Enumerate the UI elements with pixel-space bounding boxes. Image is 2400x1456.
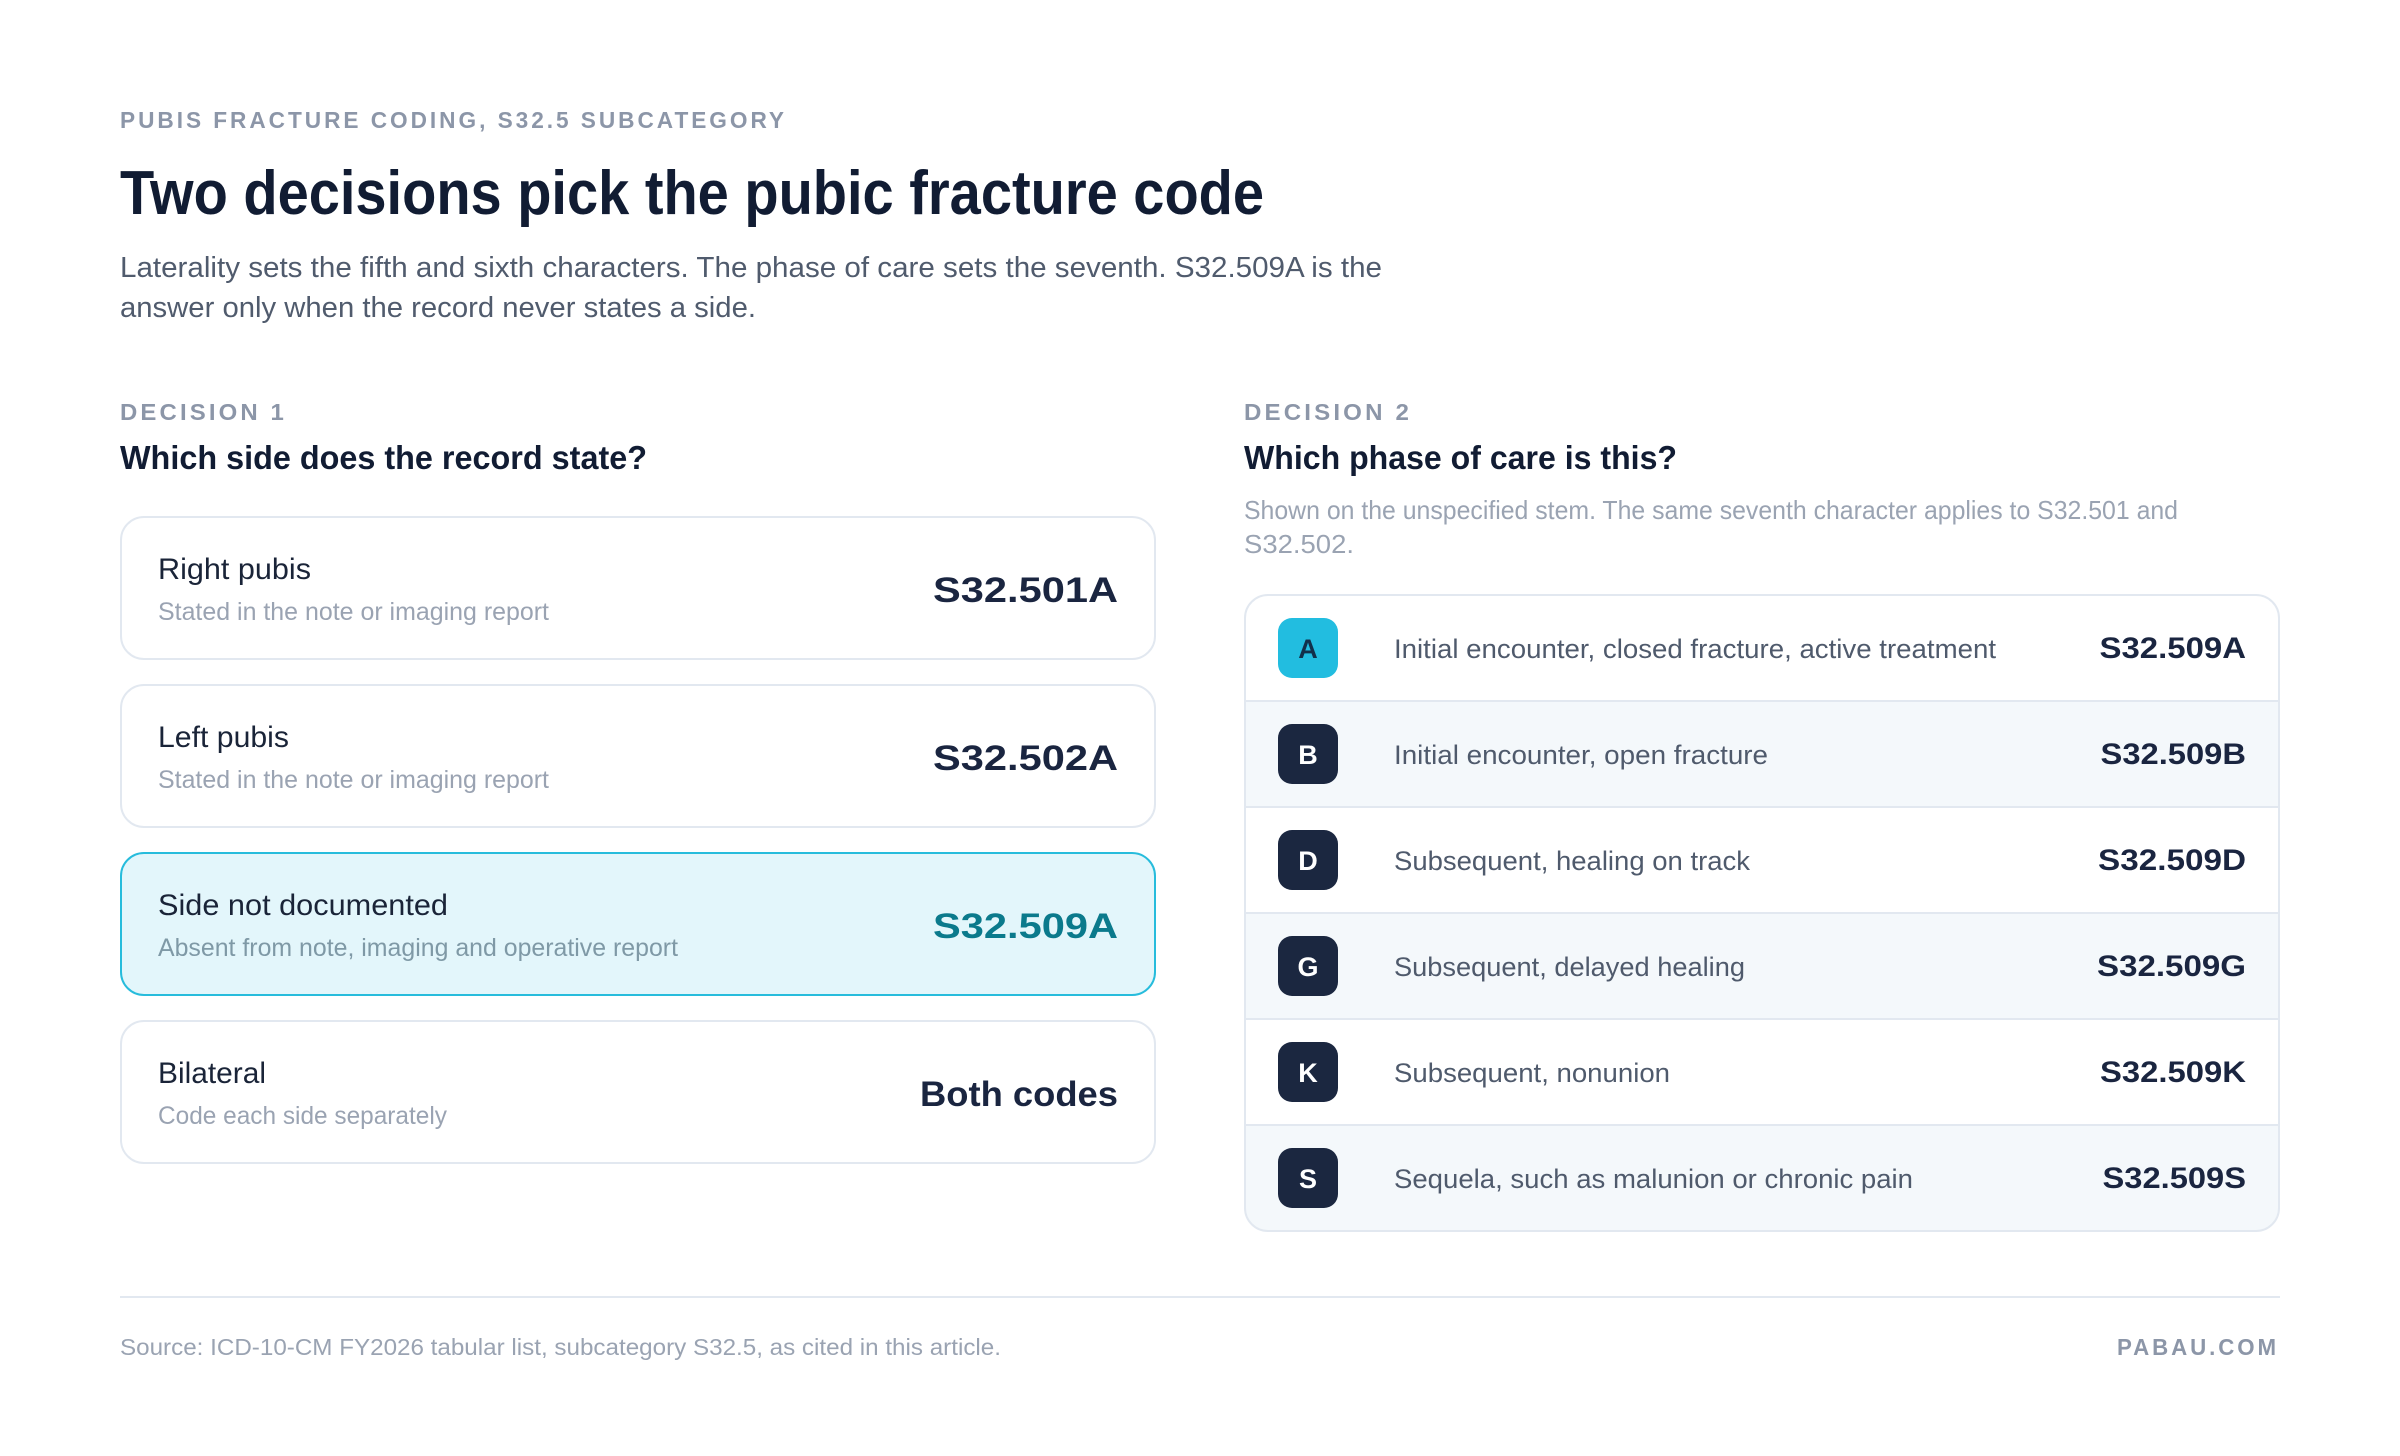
row A: Initial encounter, closed fracture, active treatment — [1394, 634, 1997, 664]
decision 1 heading: Which side does the record state? — [120, 439, 647, 476]
panel: decision 2 — [1244, 399, 2279, 1232]
row D — [1278, 830, 2246, 890]
row S — [1278, 1148, 2246, 1208]
option: left pubis: Stated in the note or imaging report — [158, 766, 549, 794]
row A: S32.509A — [2100, 632, 2246, 665]
row K — [1278, 1042, 2246, 1102]
row B: B — [1298, 740, 1318, 770]
option: right pubis: S32.501A — [933, 571, 1118, 610]
title: Two decisions pick the pubic fracture code — [120, 159, 1264, 228]
decision 2 note — [1244, 495, 2178, 559]
brand: PABAU.COM — [2117, 1334, 2279, 1360]
row B: S32.509B — [2100, 738, 2246, 771]
row K: K — [1298, 1058, 1318, 1088]
panel: decision 1 — [120, 399, 1155, 1163]
option: bilateral: Both codes — [920, 1075, 1118, 1114]
option: bilateral: Code each side separately — [158, 1102, 447, 1130]
option: side not documented (highlighted) — [121, 853, 1155, 995]
option: bilateral: Bilateral — [158, 1057, 266, 1090]
row G: S32.509G — [2097, 950, 2246, 983]
option: side not documented (highlighted): S32.509A — [933, 907, 1118, 946]
option: right pubis: Stated in the note or imaging report — [158, 598, 549, 626]
option: bilateral — [121, 1021, 1155, 1163]
row B: Initial encounter, open fracture — [1394, 740, 1768, 770]
option: left pubis — [121, 685, 1155, 827]
row D: S32.509D — [2098, 844, 2246, 877]
subtitle: answer only when the record never states a side. — [120, 292, 756, 324]
row A — [1278, 618, 2246, 678]
eyebrow: PUBIS FRACTURE CODING, S32.5 SUBCATEGORY — [120, 107, 787, 133]
row G: Subsequent, delayed healing — [1394, 952, 1745, 982]
decision 2 note: S32.502. — [1244, 529, 1354, 559]
row B — [1278, 724, 2246, 784]
decision 2 note: Shown on the unspecified stem. The same seventh character applies to S32.501 and — [1244, 495, 2178, 525]
decision 2 heading: Which phase of care is this? — [1244, 439, 1677, 476]
option: left pubis: Left pubis — [158, 721, 289, 754]
row A: A — [1298, 634, 1318, 664]
row K: S32.509K — [2100, 1056, 2246, 1089]
source note: Source: ICD-10-CM FY2026 tabular list, subcategory S32.5, as cited in this article. — [120, 1334, 1001, 1360]
option: left pubis: S32.502A — [933, 739, 1118, 778]
row S: Sequela, such as malunion or chronic pain — [1394, 1164, 1913, 1194]
subtitle — [120, 252, 1382, 324]
option: right pubis — [121, 517, 1155, 659]
decision 2 label: DECISION 2 — [1244, 399, 1412, 425]
row S: S — [1299, 1164, 1317, 1194]
row G: G — [1297, 952, 1319, 982]
option: side not documented (highlighted): Side not documented — [158, 889, 448, 922]
option: right pubis: Right pubis — [158, 553, 311, 586]
option: side not documented (highlighted): Absent from note, imaging and operative report — [158, 934, 678, 962]
row S: S32.509S — [2102, 1162, 2246, 1195]
row D: D — [1298, 846, 1318, 876]
phase table — [1245, 595, 2279, 1232]
row G — [1278, 936, 2246, 996]
row K: Subsequent, nonunion — [1394, 1058, 1670, 1088]
subtitle: Laterality sets the fifth and sixth characters. The phase of care sets the seventh. S32.509A is the — [120, 252, 1382, 284]
row D: Subsequent, healing on track — [1394, 846, 1751, 876]
decision 1 label: DECISION 1 — [120, 399, 287, 425]
